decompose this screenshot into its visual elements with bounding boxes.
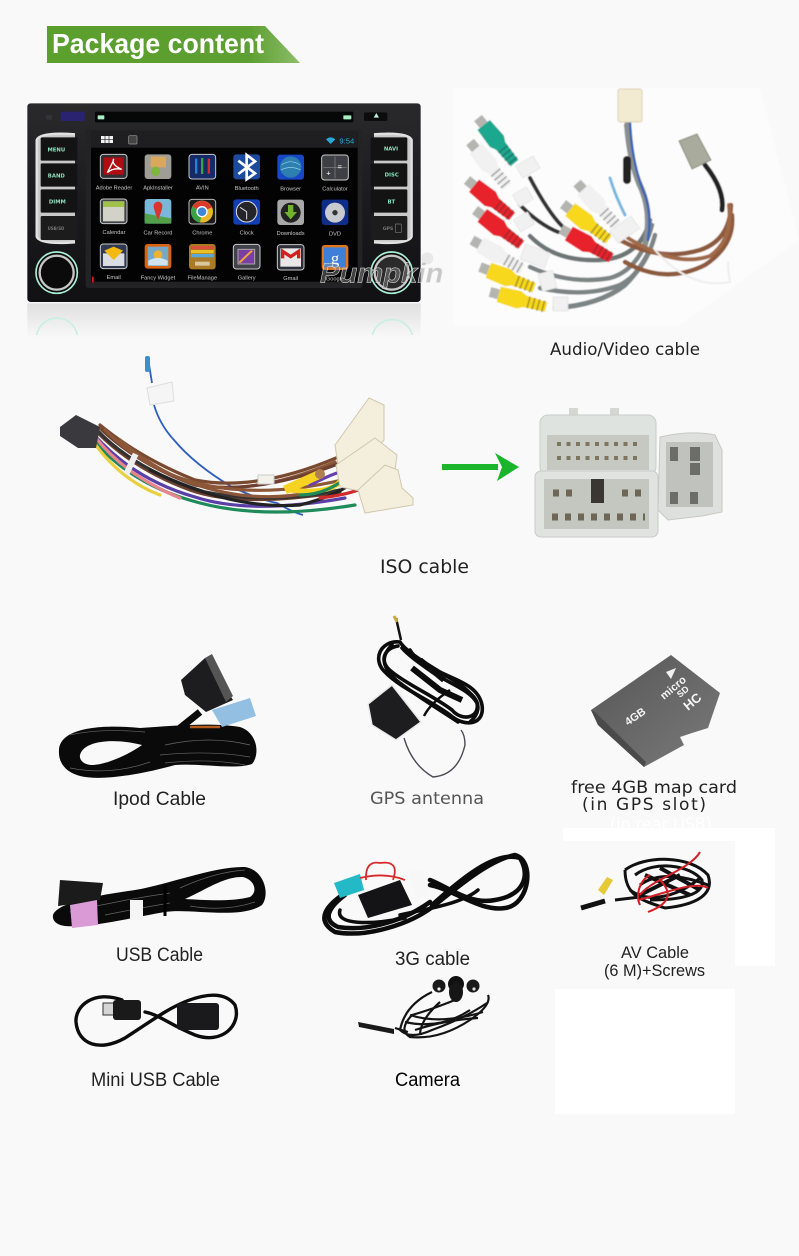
app icon: Email — [100, 244, 127, 281]
app icon: Fancy Widget — [141, 244, 176, 281]
app icon: Browser: Browser — [280, 186, 301, 192]
label: Camera: Camera — [395, 1070, 460, 1091]
app icon: Adobe Reader: Adobe Reader — [96, 185, 132, 191]
left button column: MENU — [47, 147, 65, 153]
head unit reflection — [27, 303, 421, 338]
USB female socket — [177, 1003, 219, 1030]
app icon: DVD: DVD — [329, 231, 341, 237]
blue plug — [190, 698, 256, 727]
app icon: Calculator: + — [326, 168, 331, 177]
label: free 4GB map card: (in GPS slot) — [582, 795, 706, 815]
title banner: Package content — [52, 28, 264, 59]
right button column: DISC — [385, 173, 399, 179]
mini USB cable — [76, 995, 236, 1045]
camera — [358, 976, 489, 1037]
app icon: Gallery: Gallery — [238, 276, 256, 282]
ipod connector — [181, 654, 233, 712]
app icon: Chrome: Chrome — [192, 230, 212, 236]
app icon: Google — [322, 245, 348, 282]
yellow RCA — [598, 877, 613, 895]
touch screen — [86, 129, 362, 288]
3G coil — [324, 855, 527, 933]
wire tag — [147, 382, 174, 405]
cable tie — [124, 453, 138, 475]
card print: micro — [658, 674, 689, 702]
app icon: Calendar — [100, 199, 127, 236]
label: Mini USB Cable: Mini USB Cable — [91, 1070, 220, 1091]
gray wires — [520, 122, 732, 308]
app icon: ApkInstaller: ApkInstaller — [143, 185, 173, 191]
right button column: NAVI — [384, 147, 398, 153]
antenna cable coil — [379, 616, 482, 723]
right button column: GPS — [383, 226, 394, 232]
app icon: Chrome — [189, 199, 216, 236]
head unit radio — [27, 103, 443, 338]
app icon: Google: Google — [326, 276, 344, 282]
app icon: FileManage: FileManage — [188, 276, 217, 282]
USB A plug — [103, 1000, 141, 1020]
label: free 4GB map card — [571, 778, 737, 835]
white patch top right — [563, 828, 775, 966]
USB tag — [130, 900, 143, 920]
micro SD card — [591, 655, 720, 767]
right button column — [371, 134, 412, 243]
connector: gray plug — [679, 134, 711, 169]
head unit body — [27, 103, 421, 302]
blue wire tip — [145, 356, 150, 372]
red wires — [638, 852, 708, 912]
Pumpkin watermark: Pumpkin — [320, 258, 443, 289]
label: Audio/Video cable: Audio/Video cable — [550, 340, 700, 360]
RCA connector — [285, 469, 325, 490]
left knob — [36, 252, 77, 293]
antenna puck — [368, 685, 421, 740]
card print: 4GB — [623, 706, 648, 728]
right button column: BT — [387, 199, 396, 205]
ipod cable — [59, 654, 256, 778]
app icon: AVIN: AVIN — [196, 186, 209, 192]
USB coil — [53, 867, 266, 926]
camera lead — [358, 1022, 394, 1034]
status bar: 9:54 — [339, 136, 355, 145]
app icon: DVD — [322, 200, 348, 237]
USB cable — [53, 867, 266, 928]
bottom connector block — [535, 471, 658, 537]
app icon: Calculator — [322, 155, 348, 192]
3G box — [358, 880, 412, 918]
camera head — [432, 976, 480, 1002]
3G cyan connector — [334, 874, 364, 898]
label: ISO cable: ISO cable — [380, 556, 469, 578]
audio video cable photo — [453, 88, 799, 325]
label: free 4GB map card: (in rear USB) — [610, 815, 712, 835]
app icon: Bluetooth — [233, 154, 260, 192]
RCA plugs — [461, 112, 623, 316]
app icon: Clock — [233, 199, 260, 237]
app icon: ApkInstaller — [143, 154, 173, 191]
top connector block — [540, 408, 656, 475]
left button column: DIMM — [49, 199, 66, 205]
small white clip — [258, 475, 274, 484]
AV cable — [581, 852, 709, 912]
label: AV Cable: AV Cable — [621, 943, 689, 962]
card print: SD — [675, 684, 691, 700]
left button column: BAND — [48, 173, 65, 179]
label: AV Cable: (6 M)+Screws — [604, 961, 705, 980]
USB plug — [58, 880, 103, 906]
app icon: Car Record: Car Record — [144, 230, 172, 236]
ISO cable harness — [60, 356, 413, 515]
app icon: Downloads — [277, 200, 305, 237]
AV plug — [581, 901, 605, 908]
app icon: Adobe Reader — [96, 154, 132, 191]
connector close-up — [535, 408, 722, 537]
left button column: USB/SD — [48, 226, 65, 231]
3G wires — [360, 863, 405, 880]
wire bundle — [92, 425, 358, 512]
pink connector — [70, 900, 98, 928]
app icon: Calendar: Calendar — [103, 230, 126, 236]
thin lead loop — [404, 730, 465, 777]
app icon: Calculator: = — [338, 162, 342, 171]
disc slot — [46, 112, 387, 122]
label: 3G cable: 3G cable — [395, 949, 470, 970]
app icon: Car Record — [144, 199, 172, 236]
connector: white plug — [618, 89, 642, 122]
app icon: Email: Email — [107, 275, 121, 281]
app icon: Gallery — [233, 244, 260, 282]
label: Ipod Cable: Ipod Cable — [113, 789, 206, 810]
status bar — [101, 136, 355, 145]
app icon: FileManage — [188, 244, 217, 282]
blue wire — [148, 358, 303, 515]
red marker — [92, 277, 94, 282]
app icon: Gmail: Gmail — [283, 276, 298, 282]
card print: HC — [680, 689, 705, 713]
black coil — [615, 859, 709, 908]
3G cable — [324, 855, 527, 933]
app icon: Fancy Widget: Fancy Widget — [141, 275, 176, 281]
camera cable coil — [395, 992, 489, 1037]
label: USB Cable: USB Cable — [116, 945, 203, 966]
app icon: AVIN — [189, 154, 216, 192]
right connector block — [658, 433, 722, 520]
app icon: Google: g — [331, 249, 340, 268]
app icon: Calculator: Calculator — [322, 186, 348, 192]
left button column — [37, 134, 77, 243]
app icon: Bluetooth: Bluetooth — [235, 186, 259, 192]
white connectors — [335, 398, 413, 513]
green arrow — [442, 453, 519, 481]
cable coil — [59, 712, 256, 778]
wire labels — [513, 156, 640, 311]
3G tag — [409, 869, 429, 899]
label: free 4GB map card: free 4GB map card — [571, 778, 737, 798]
right knob — [371, 252, 412, 293]
app icon: Clock: Clock — [240, 231, 254, 237]
white patch lower right — [555, 989, 735, 1114]
app icon: Downloads: Downloads — [277, 231, 305, 237]
app icon: Browser — [277, 155, 304, 192]
GPS antenna — [368, 616, 482, 777]
ISO plug — [60, 415, 100, 448]
card print — [623, 674, 705, 728]
label: GPS antenna: GPS antenna — [370, 789, 484, 809]
app icon: Gmail — [277, 245, 304, 282]
label: AV Cable — [604, 943, 705, 980]
